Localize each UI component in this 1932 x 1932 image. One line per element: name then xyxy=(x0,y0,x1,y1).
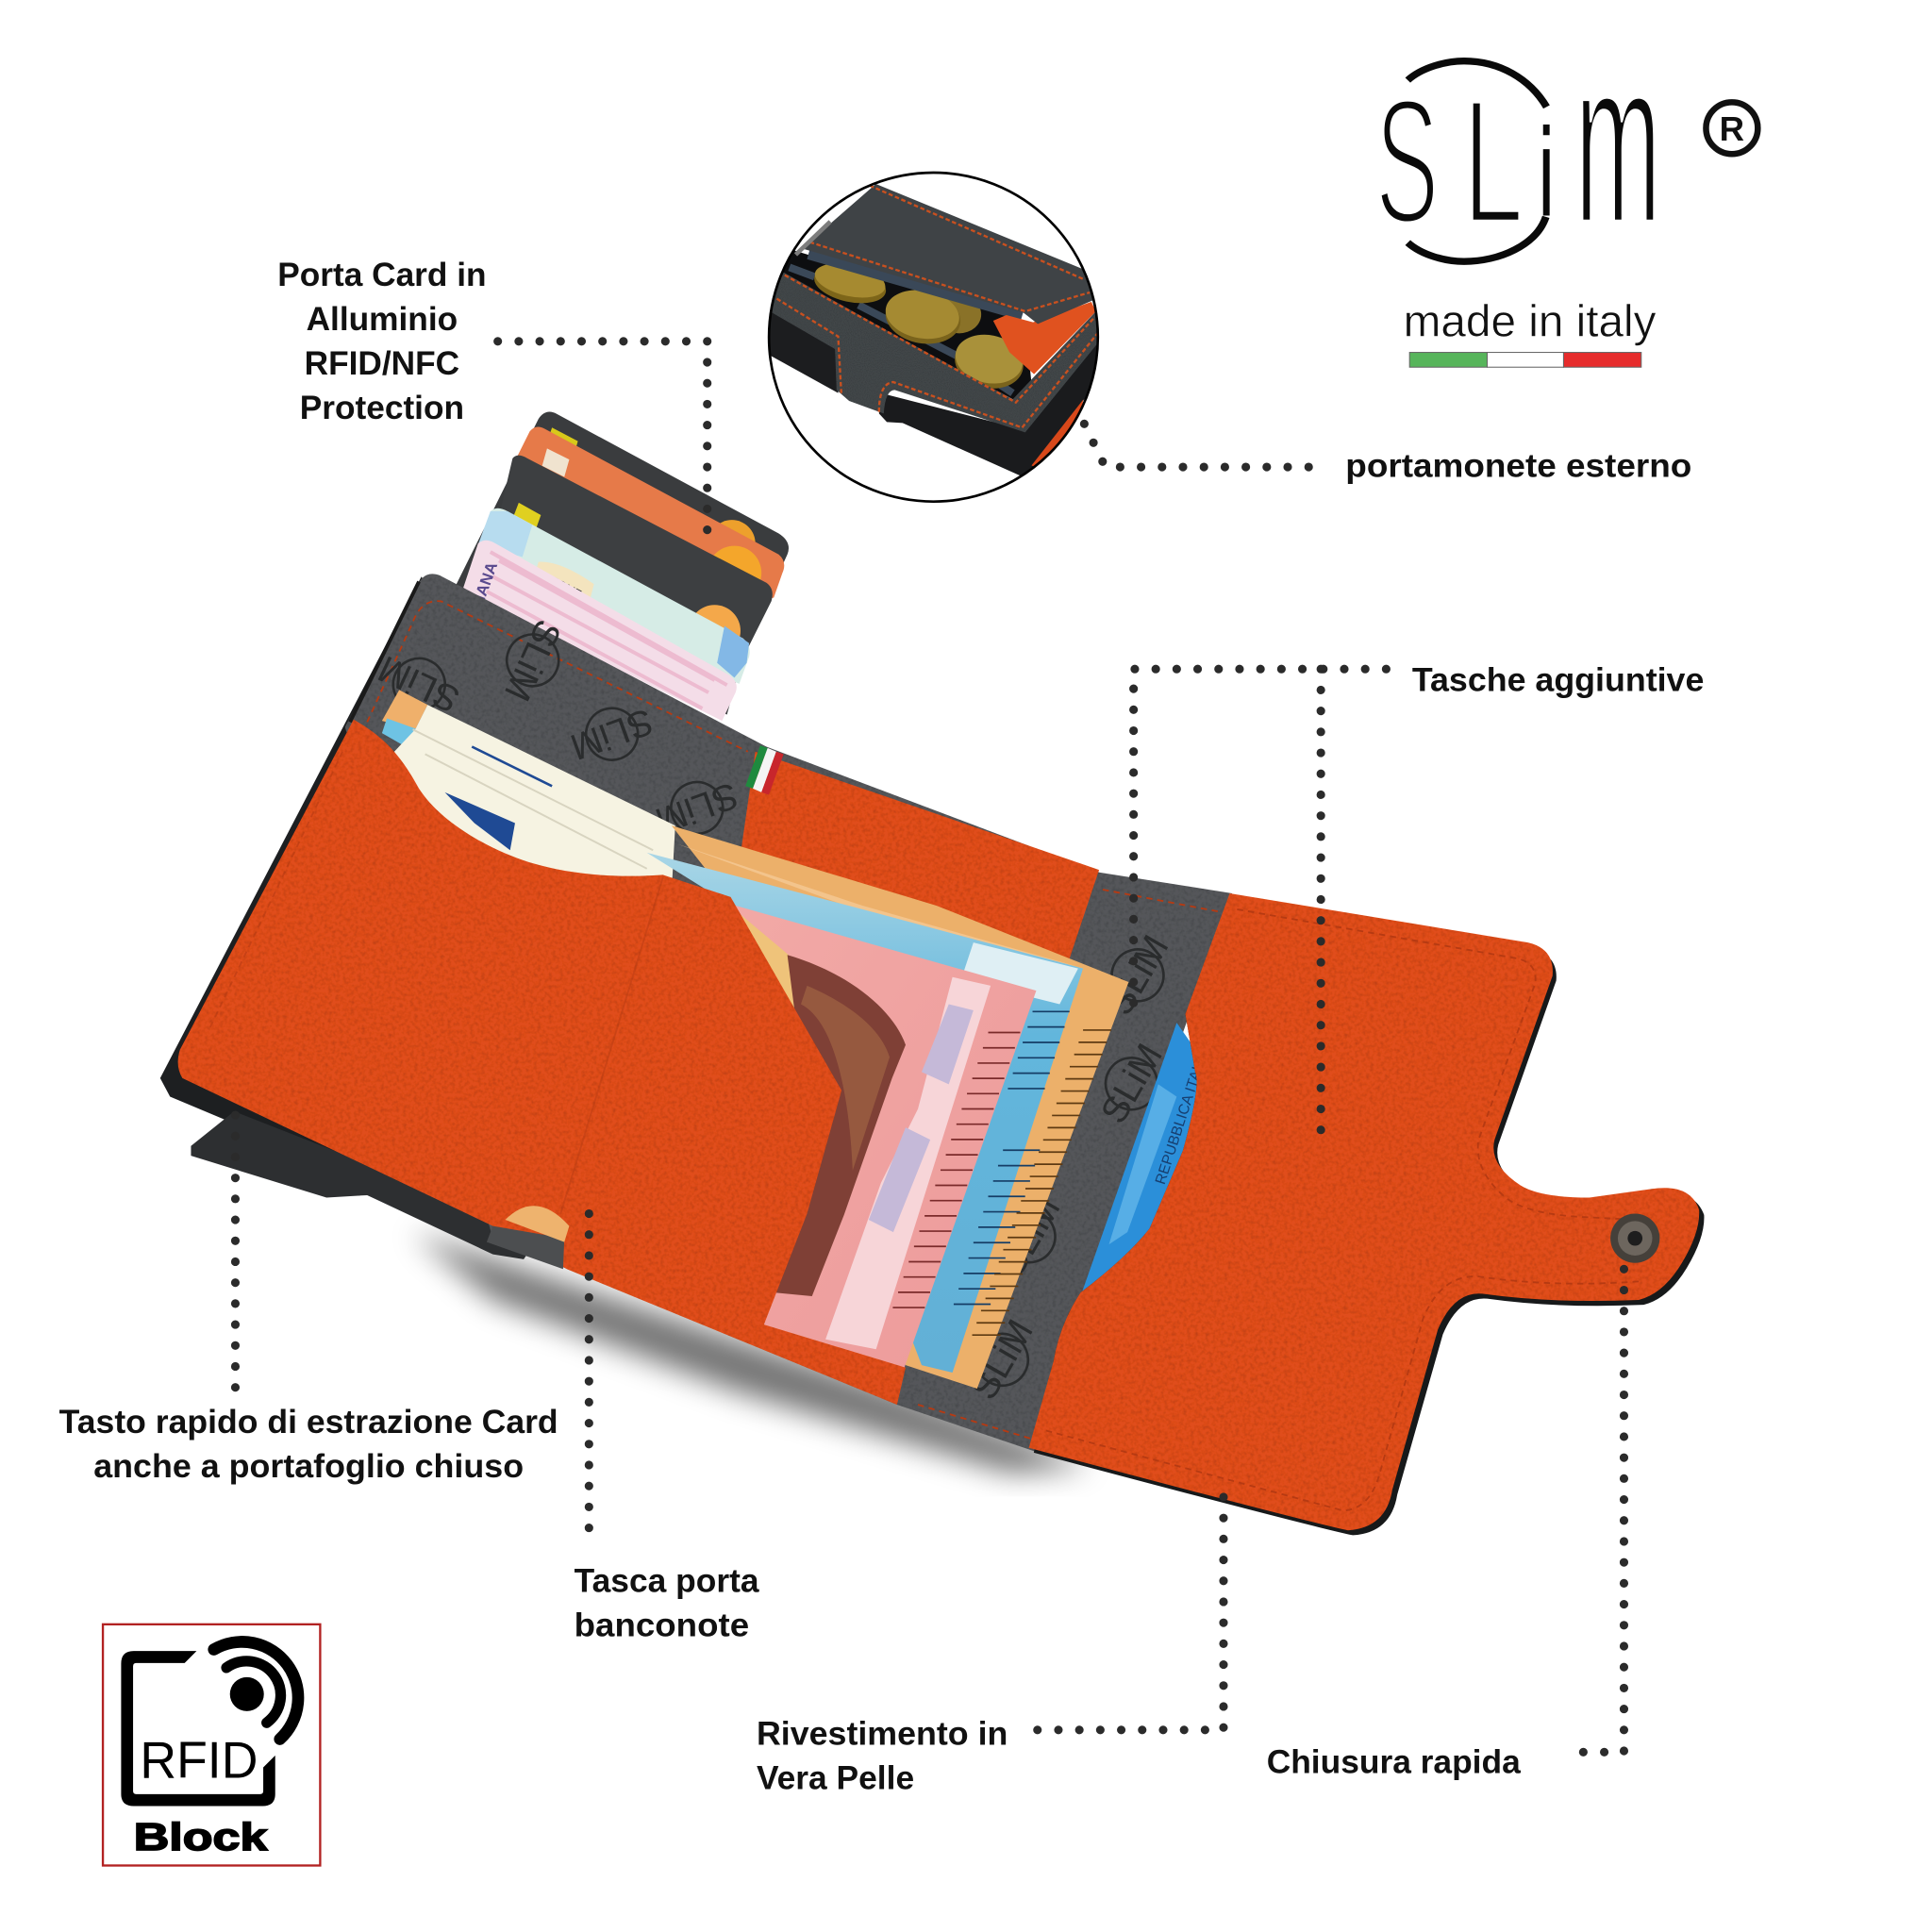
thumb notch xyxy=(487,1206,569,1269)
SLIM watermark prints: SLiM xyxy=(1100,929,1177,1022)
registered mark: R xyxy=(1720,109,1744,148)
blue ID card in pocket: REPUBBLICA ITALIANA xyxy=(1153,1027,1218,1187)
coins xyxy=(810,258,1028,394)
upper zipper tape xyxy=(808,255,1022,316)
label: portamonete esterno: portamonete esterno xyxy=(1345,447,1691,484)
drop shadow xyxy=(413,1232,1091,1473)
RFID text: RFID xyxy=(140,1731,258,1790)
dotted leader: Tasto rapido xyxy=(232,1115,239,1392)
blue note xyxy=(647,853,1083,1373)
logo letter i: i xyxy=(1538,103,1555,243)
made in italy: made in italy xyxy=(1404,296,1657,346)
suede inner lining xyxy=(345,574,1232,1452)
pink note xyxy=(727,903,1036,1368)
wallet product illustration xyxy=(160,412,1704,1535)
SLIM watermark prints: SLiM xyxy=(964,1313,1041,1407)
dotted leader: Tasca porta banconote xyxy=(586,1214,592,1534)
logo letter m: m xyxy=(1574,8,1661,273)
SLIM logo xyxy=(1375,8,1661,273)
dotted leader: portamonete xyxy=(1084,424,1321,467)
lower zipper tape xyxy=(790,267,1012,393)
SLIM watermark prints: SLiM xyxy=(373,647,466,720)
RFID Block badge xyxy=(103,1624,320,1866)
label: Porta Card: Protection xyxy=(300,390,464,426)
coin pocket inset xyxy=(764,173,1101,502)
aluminium card case xyxy=(160,576,690,1259)
Italian flag bar xyxy=(1409,353,1641,367)
holographic strip xyxy=(825,977,991,1349)
inset ring xyxy=(769,173,1098,502)
red frame xyxy=(103,1624,320,1866)
label: Rivestimento in Vera Pelle xyxy=(757,1715,1008,1796)
label: Rivestimento in Vera Pelle: Vera Pelle xyxy=(757,1759,914,1796)
label: Rivestimento in Vera Pelle: Rivestimento in xyxy=(757,1715,1008,1752)
zip pull xyxy=(795,222,830,255)
Block text: Block xyxy=(134,1815,268,1858)
label: Tasca porta banconote: Tasca porta xyxy=(575,1563,759,1600)
label: Chiusura rapida: Chiusura rapida xyxy=(1267,1744,1521,1781)
SLIM watermark prints: SLiM xyxy=(565,700,658,767)
logo letter S: S xyxy=(1375,61,1439,260)
left orange pocket and note flap xyxy=(178,720,906,1405)
upper orange strip xyxy=(740,752,1099,958)
stack of cards xyxy=(456,412,789,721)
label: Tasca porta banconote xyxy=(575,1563,759,1644)
white notes in left pocket xyxy=(382,690,675,893)
top leather flap xyxy=(802,184,1097,324)
orange lining xyxy=(993,302,1096,375)
Italian flag label xyxy=(745,745,784,794)
lower leather panel xyxy=(764,272,1101,432)
label: Tasca porta banconote: banconote xyxy=(575,1607,749,1644)
tan note xyxy=(672,825,1128,1389)
SLIM watermark prints: SLiM xyxy=(1093,1037,1171,1130)
logo letter L: L xyxy=(1462,63,1524,261)
dotted leader: Tasche aggiuntive xyxy=(1134,669,1386,1131)
label: Porta Card: Porta Card in xyxy=(277,257,487,293)
signal icon xyxy=(214,1641,298,1740)
SLIM watermark prints: SLiM xyxy=(991,1190,1069,1283)
bank notes xyxy=(382,690,1128,1389)
bridge arch xyxy=(774,955,906,1296)
label: Tasto rapido: anche a portafoglio chiuso xyxy=(93,1448,524,1485)
dotted leader: Chiusura rapida xyxy=(1562,1269,1624,1752)
label: Porta Card: Alluminio xyxy=(307,301,458,338)
label: Porta Card: RFID/NFC xyxy=(305,345,459,382)
dotted leader: Porta Card xyxy=(498,341,708,551)
black case edge xyxy=(770,313,838,393)
card outline icon xyxy=(121,1651,275,1807)
label: Tasche aggiuntive: Tasche aggiuntive xyxy=(1412,662,1704,699)
security ticks xyxy=(892,1033,1020,1307)
logo ring xyxy=(1407,61,1546,261)
right orange panel with closure tab xyxy=(1029,893,1704,1535)
registered mark xyxy=(1706,102,1757,154)
SLIM watermark prints: SLiM xyxy=(496,613,568,707)
stack of cards: IANA xyxy=(471,559,501,603)
label: Tasto rapido xyxy=(59,1404,558,1485)
pocket interior xyxy=(780,250,1031,403)
SLIM watermark prints: SLiM xyxy=(650,774,743,841)
snap button xyxy=(1610,1214,1659,1263)
stack of cards: LKCB xyxy=(546,572,585,602)
label: Tasto rapido: Tasto rapido di estrazione Card xyxy=(59,1404,558,1441)
SLIM watermark prints xyxy=(370,611,1181,1409)
blue ID card in pocket xyxy=(1080,1023,1220,1296)
dotted leader: Rivestimento xyxy=(1035,1497,1224,1730)
